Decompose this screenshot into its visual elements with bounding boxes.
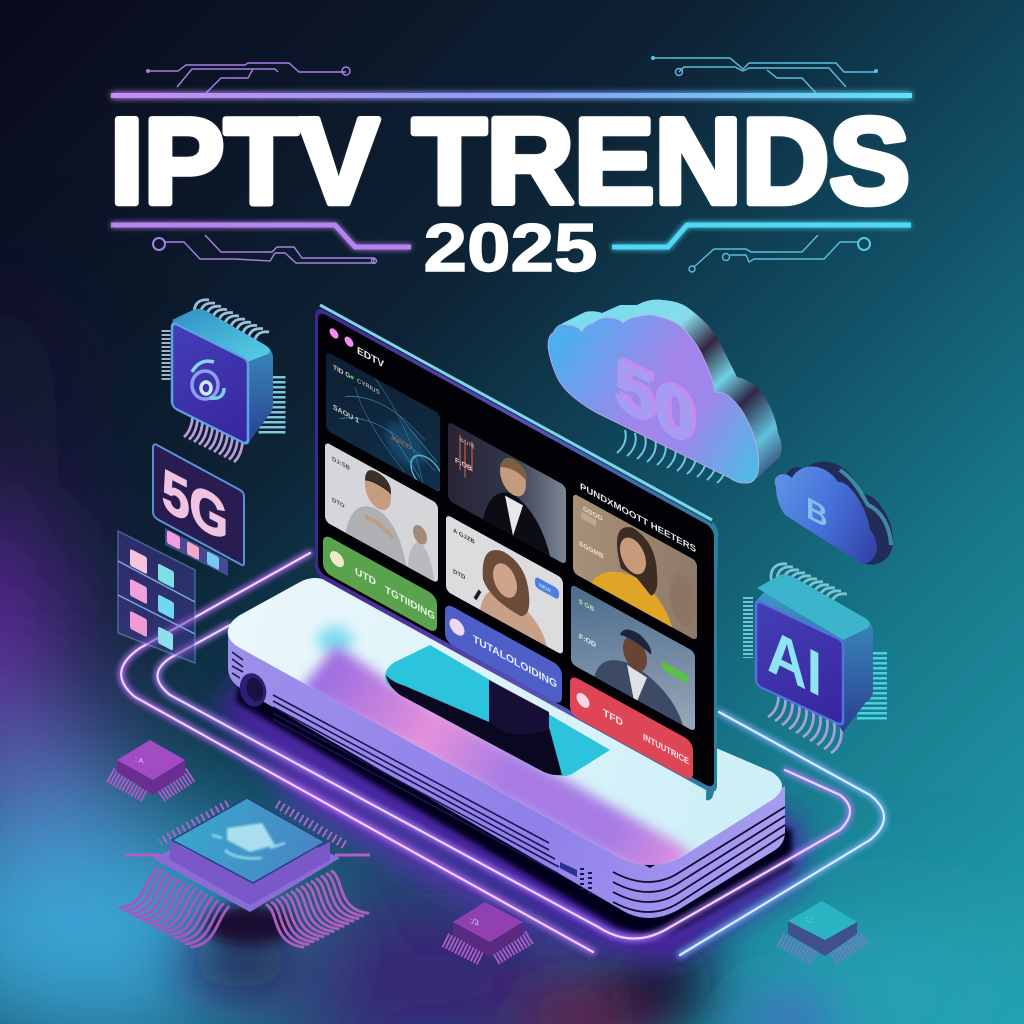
platform shadow and reflection <box>215 680 800 965</box>
chip: large processor <box>120 798 370 947</box>
tile: network map: SAOU 1 <box>333 402 359 425</box>
button: green: UTD <box>355 566 376 588</box>
cloud number: 50 <box>614 341 694 462</box>
subtitle year: 2025 <box>424 210 598 286</box>
chip: AI <box>748 564 873 753</box>
window dots <box>330 326 354 349</box>
button: green: TGTIIDING <box>385 584 435 623</box>
swirl icon <box>192 361 224 399</box>
cloud extrusion <box>553 300 782 478</box>
tile: network map: CYRIUS <box>357 377 380 396</box>
tile: man with beret: F:OD <box>579 632 597 650</box>
tile: network map <box>326 351 443 498</box>
5G tabs <box>165 528 228 576</box>
AI label: AI <box>767 613 822 711</box>
box lens <box>236 670 270 710</box>
tile: man with beret <box>571 584 695 739</box>
AI chip body <box>757 574 873 732</box>
title: IPTV TRENDS <box>110 93 910 229</box>
button: green <box>323 533 437 634</box>
lower neon lines <box>111 225 911 247</box>
box port <box>560 862 590 896</box>
button: red: INTUUTRICE <box>643 732 689 768</box>
tile: man with beret: $ GB <box>579 599 594 613</box>
5G panel <box>153 444 244 565</box>
tile: man in suit <box>448 421 566 565</box>
button: red: TFD <box>603 707 623 729</box>
tile: man with glasses: DJ:SB <box>332 456 350 472</box>
tv screen <box>318 311 714 793</box>
set-top box <box>228 578 785 918</box>
chip pins <box>166 300 272 462</box>
chip: small purple bottom <box>445 902 530 958</box>
tv frame <box>315 305 718 800</box>
cloud face <box>548 315 759 483</box>
tile: woman <box>446 514 563 655</box>
tile: woman: DTD <box>453 568 466 582</box>
tile: woman in yellow <box>573 493 697 650</box>
chip: small teal bottom <box>780 901 866 958</box>
button: red <box>570 674 693 782</box>
5G sign <box>153 444 244 576</box>
tile heading: PUNDXMOOTT HEETERS <box>580 481 697 556</box>
tile: man with glasses: DTO <box>332 497 345 510</box>
tile: woman: NEW <box>539 582 552 595</box>
processor icon <box>212 823 285 858</box>
large cloud <box>548 300 782 483</box>
lower circuit traces <box>153 235 870 272</box>
glass status stack <box>118 531 195 663</box>
chip body <box>172 309 273 445</box>
small cloud: B <box>806 490 828 535</box>
top circuit traces <box>146 56 878 93</box>
tile: woman in yellow: SGGMB <box>579 541 604 561</box>
tile: network map: TID G <box>333 364 350 380</box>
button: blue: TUTALOLOIDING <box>473 634 557 691</box>
box front faces <box>228 630 785 918</box>
tile: woman: A GJZB <box>453 527 475 546</box>
top neon bar <box>111 92 912 99</box>
chip: swirl icon <box>166 300 273 462</box>
box reflections <box>300 626 692 885</box>
box top face <box>228 578 782 865</box>
button: blue <box>445 602 562 706</box>
chip: small purple top <box>110 740 192 795</box>
box vents <box>232 652 785 912</box>
processor top <box>172 798 325 883</box>
neon platform rings <box>121 553 884 955</box>
chip: small purple top: :.A <box>135 755 144 766</box>
tv brand label: EDTV <box>357 345 385 371</box>
processor base <box>152 815 340 912</box>
AI chip pins <box>748 564 872 753</box>
tile: man in suit: F:OB <box>455 455 473 474</box>
tile: network map: JOREID <box>391 435 411 452</box>
small cloud <box>775 462 893 565</box>
title: IPTV TRENDS <box>110 93 910 229</box>
tile: man with glasses <box>325 442 438 588</box>
chip: small teal bottom: :.: <box>806 914 813 925</box>
tv stand <box>385 645 610 776</box>
5G label: 5G <box>162 456 228 555</box>
cloud number: 50 <box>618 339 698 460</box>
tile: woman in yellow: GDOD <box>583 506 602 523</box>
cloud pins <box>617 430 726 483</box>
tile: man in suit: B/UTE <box>460 437 475 451</box>
processor pins <box>120 868 368 947</box>
chip: small purple bottom: :/3 <box>470 916 479 928</box>
